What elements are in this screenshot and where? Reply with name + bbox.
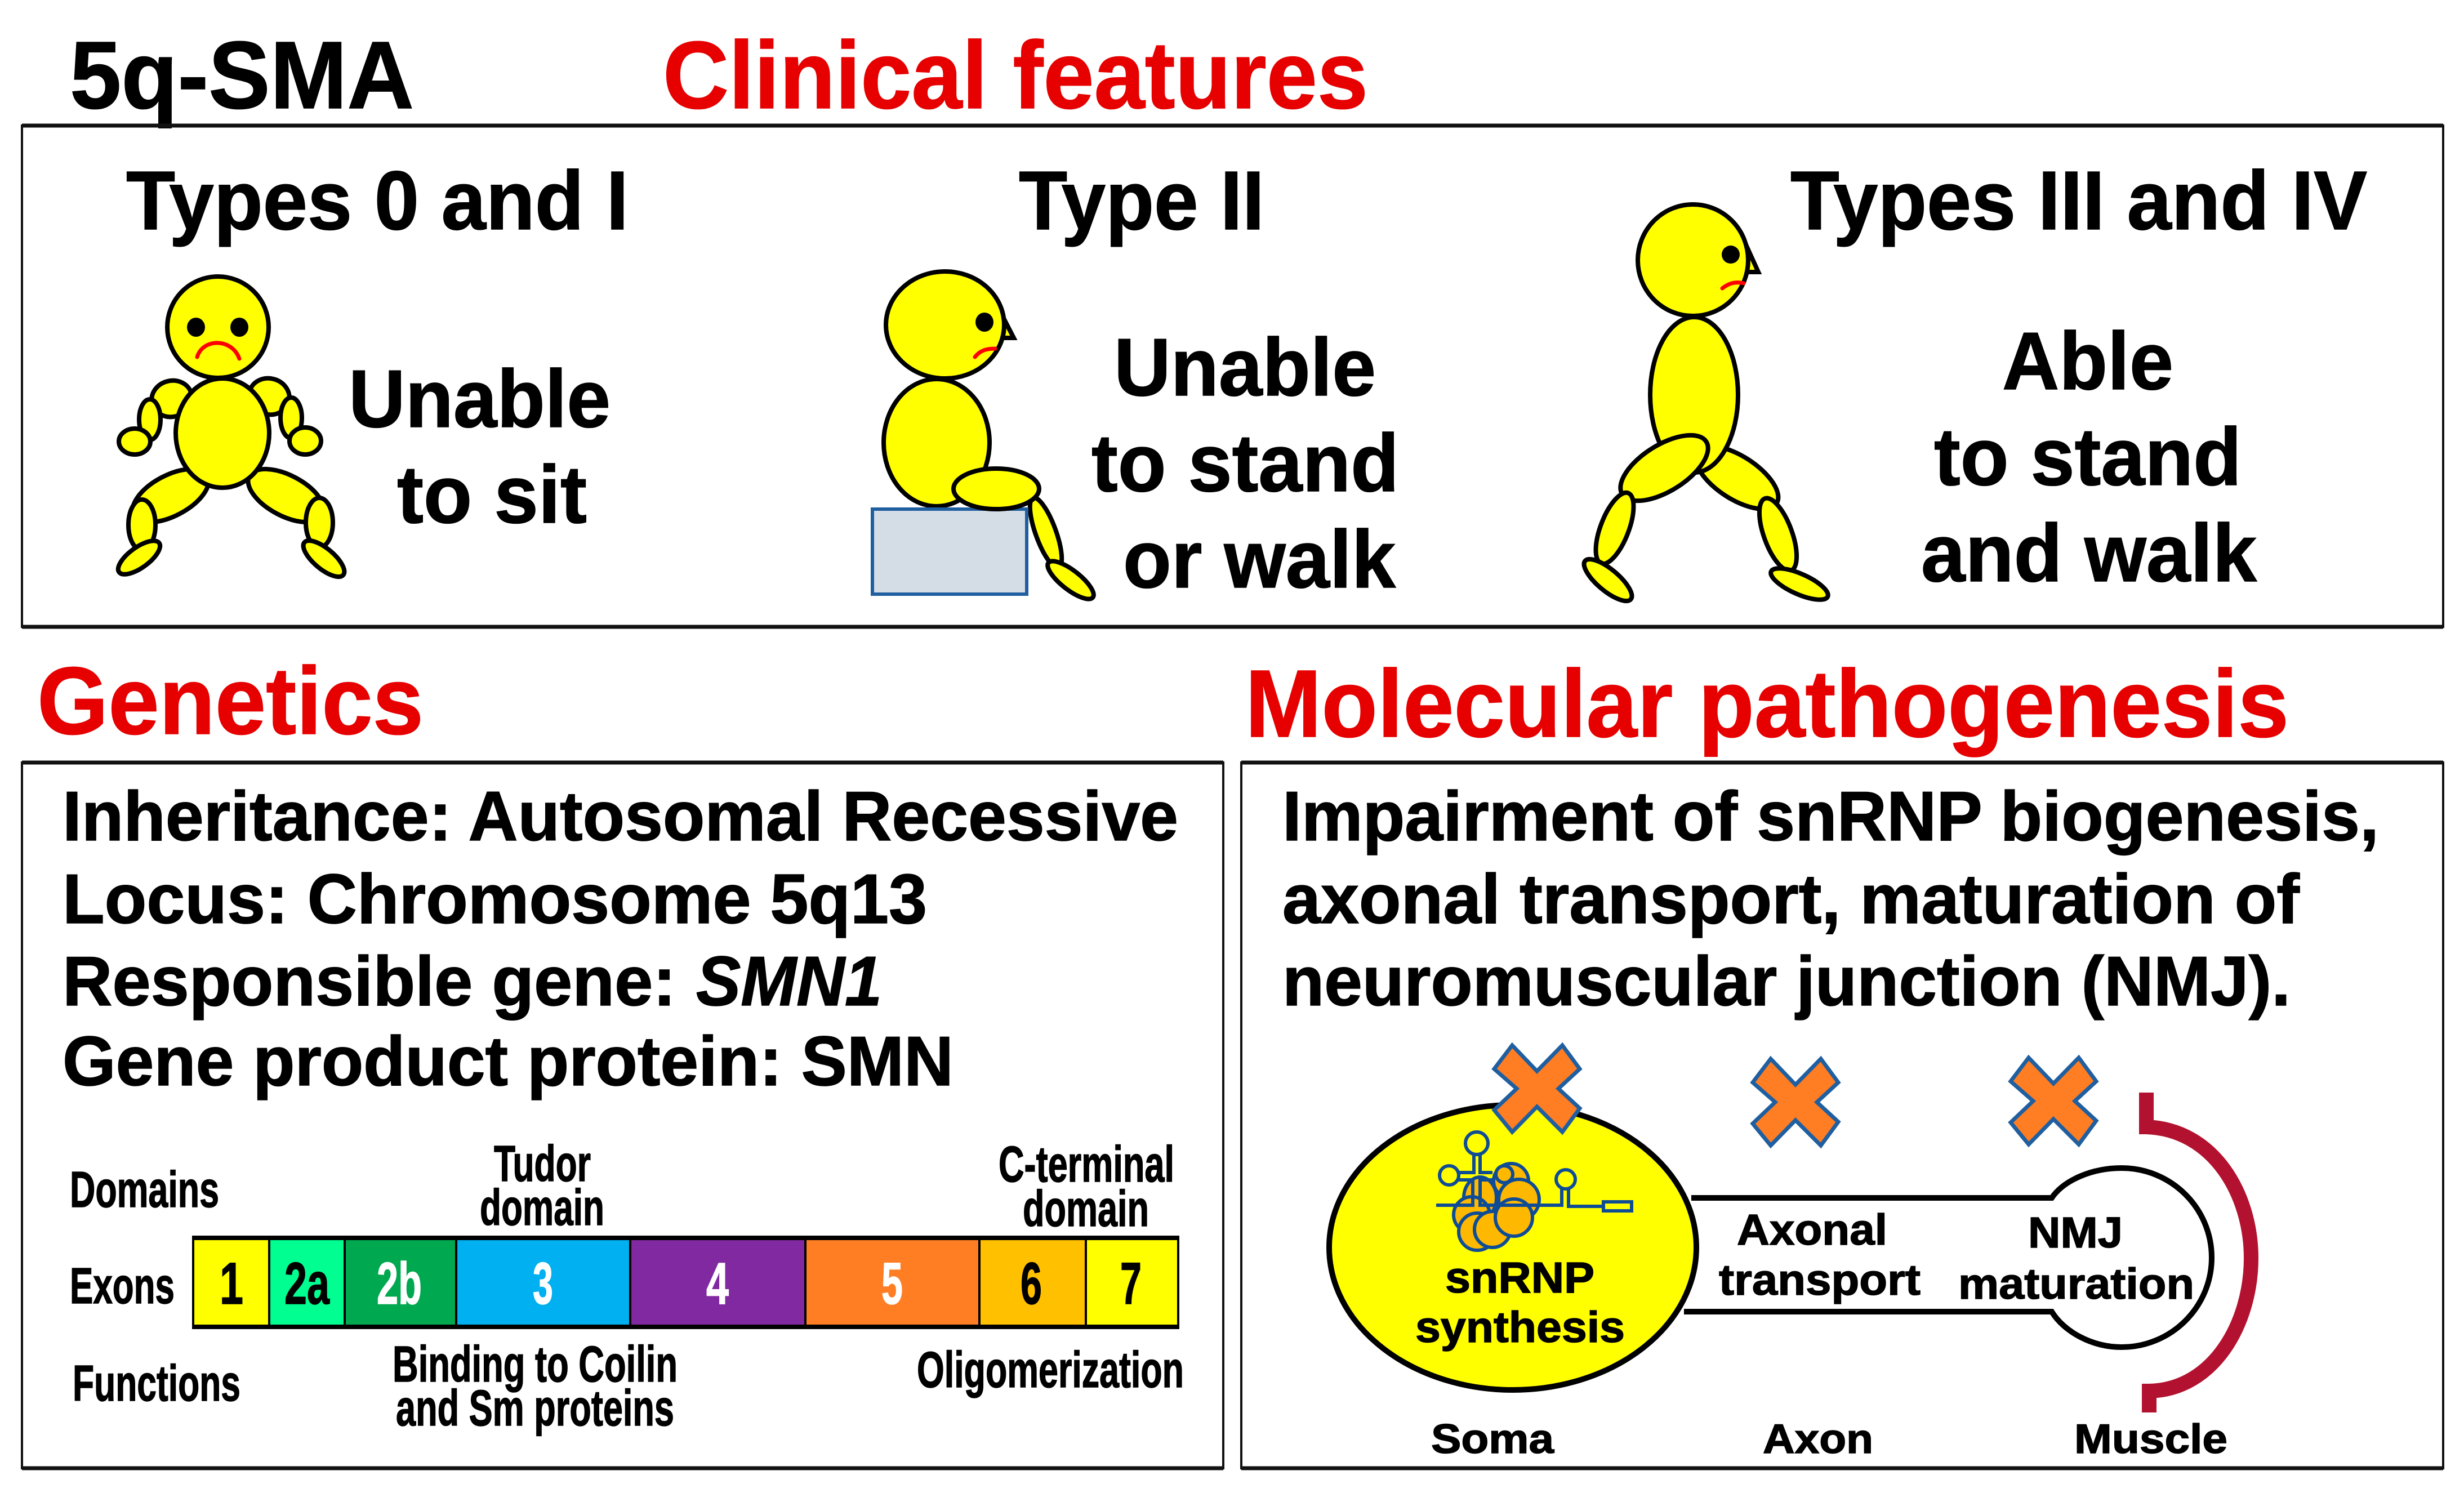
text: pathogenesis description (1282, 778, 2379, 1020)
text: genetics facts: Locus: Chromosome 5q13 (63, 861, 927, 938)
label: snRNP synthesis: snRNP (1445, 1254, 1594, 1302)
label: NMJ maturation: maturation (1958, 1260, 2194, 1308)
labels: domains row: Domains (70, 1162, 219, 1218)
chart: SMN exon bar (192, 1238, 1179, 1327)
icon: orange X on axon (1753, 1059, 1838, 1146)
text: genetics facts: Gene product protein: SMN (63, 1023, 953, 1100)
icon: walking figure (1578, 204, 1832, 608)
icon: grey seat box (872, 509, 1027, 594)
heading: Molecular pathogenesis: Molecular pathogenesis (1245, 650, 2289, 757)
heading: Types 0 and I: Types 0 and I (126, 154, 629, 247)
panel: genetics (22, 763, 1223, 1468)
icon: muscle bracket (2146, 1093, 2251, 1412)
diagram: axon and NMJ outline (1684, 1168, 2212, 1347)
panel: clinical features (22, 126, 2443, 627)
icon: orange X on soma (1494, 1045, 1580, 1132)
heading: Clinical features: Clinical features (663, 22, 1368, 129)
heading: Genetics: Genetics (37, 648, 424, 755)
label: Axonal transport (1719, 1206, 1921, 1304)
labels: functions row: Functions (73, 1356, 240, 1412)
heading: Type II: Type II (1019, 154, 1264, 247)
text: Unable to stand or walk (1091, 322, 1399, 605)
label: Exons: Exons (70, 1258, 175, 1314)
icon: seated figure (872, 271, 1099, 605)
label: Axonal transport: transport (1719, 1256, 1921, 1304)
chart: SMN exon bar: 7 (1120, 1251, 1142, 1317)
title: 5q-SMA: 5q-SMA (70, 22, 414, 129)
chart: SMN exon bar: 4 (706, 1251, 729, 1317)
text: pathogenesis description: neuromuscular junction (NMJ). (1282, 943, 2291, 1020)
text: pathogenesis description: axonal transport, maturation of (1282, 861, 2300, 938)
labels: functions row: Binding to Coilin (393, 1336, 678, 1393)
label: snRNP synthesis: synthesis (1415, 1303, 1625, 1352)
label: snRNP synthesis (1415, 1254, 1625, 1352)
labels: domains row (70, 1136, 1174, 1237)
chart: SMN exon bar: 2b (377, 1251, 422, 1317)
chart: SMN exon bar: 3 (533, 1251, 553, 1317)
label: Axonal transport: Axonal (1737, 1206, 1887, 1254)
labels: domains row: domain (480, 1180, 604, 1236)
diagram: soma (1329, 1105, 1696, 1390)
icon: figure lying, unable to sit (113, 277, 350, 583)
chart: SMN exon bar: 5 (881, 1251, 903, 1317)
labels: domains row: Tudor (494, 1136, 591, 1192)
text: Unable to sit: to sit (397, 449, 587, 540)
text: Able to stand and walk: Able (2002, 315, 2173, 407)
chart: SMN exon bar: 6 (1021, 1251, 1042, 1317)
labels: functions row (73, 1336, 1184, 1437)
text: Able to stand and walk: and walk (1921, 507, 2257, 599)
label: Muscle: Muscle (2074, 1416, 2227, 1462)
labels: functions row: and Sm proteins (396, 1380, 674, 1437)
text: genetics facts: SMN1 (696, 943, 882, 1020)
text: Unable to stand or walk: Unable (1114, 322, 1376, 413)
text: Unable to stand or walk: to stand (1091, 417, 1399, 509)
labels: domains row: C-terminal (999, 1137, 1174, 1193)
text: genetics facts (63, 778, 1178, 1100)
text: Unable to sit: Unable (349, 353, 611, 444)
icon: snRNP complex (1436, 1132, 1632, 1250)
heading: Types III and IV: Types III and IV (1790, 154, 2367, 247)
icon: orange X on NMJ (2011, 1058, 2096, 1144)
label: NMJ maturation: NMJ (2028, 1209, 2123, 1257)
text: Able to stand and walk (1921, 315, 2257, 599)
chart: SMN exon bar: 1 (220, 1251, 243, 1317)
label: NMJ maturation (1958, 1209, 2194, 1308)
label: Axon: Axon (1763, 1416, 1873, 1462)
text: genetics facts: Inheritance: Autosomal Recessive (63, 778, 1178, 855)
labels: domains row: domain (1023, 1181, 1149, 1237)
text: Unable to stand or walk: or walk (1123, 514, 1396, 605)
text: genetics facts: Responsible gene: (63, 943, 676, 1020)
chart: SMN exon bar: 2a (284, 1251, 330, 1317)
text: Unable to sit (349, 353, 611, 540)
panel: molecular pathogenesis (1241, 763, 2443, 1468)
labels: functions row: Oligomerization (917, 1342, 1184, 1398)
label: Soma: Soma (1431, 1416, 1555, 1462)
text: pathogenesis description: Impairment of snRNP biogenesis, (1282, 778, 2379, 855)
text: Able to stand and walk: to stand (1934, 411, 2242, 502)
